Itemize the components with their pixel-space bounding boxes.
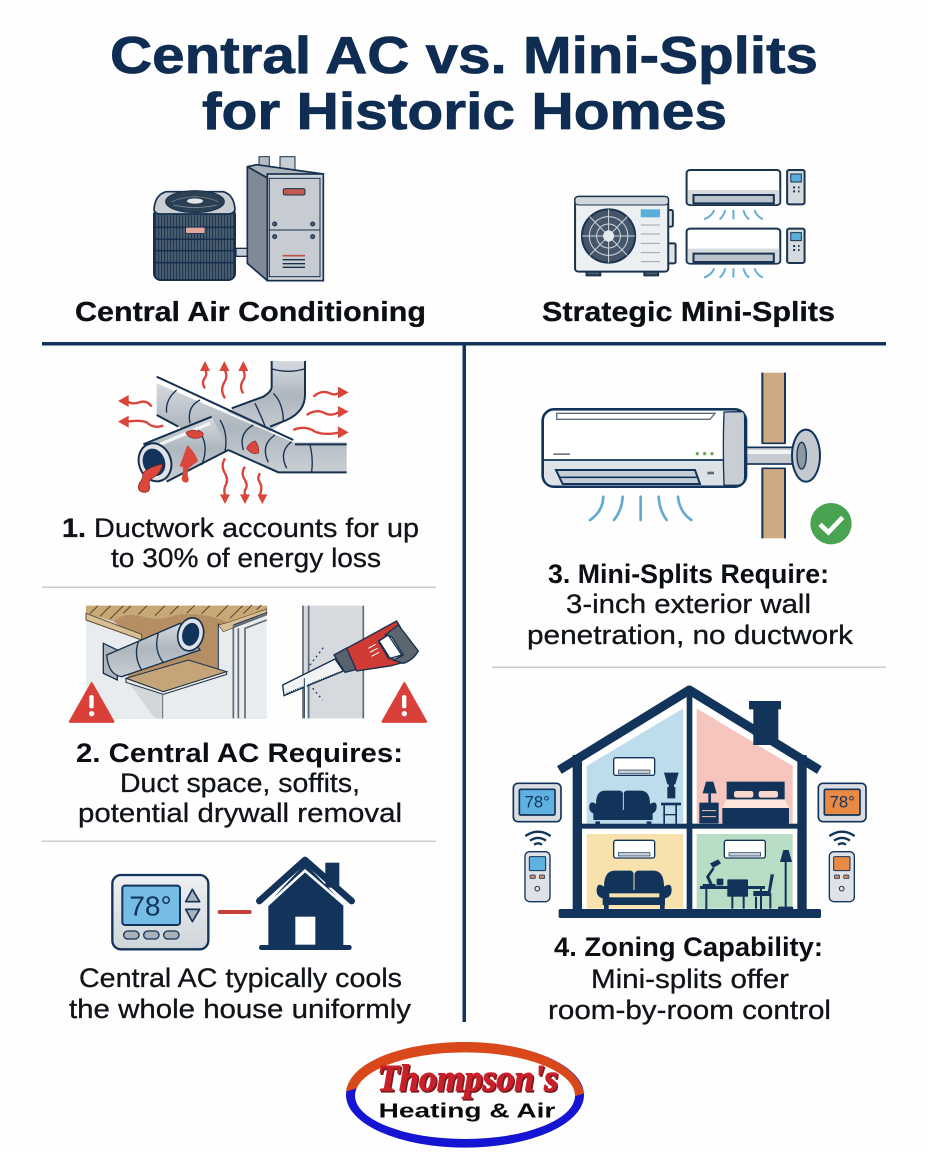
text: zoning capability: Mini-splits offer bbox=[591, 964, 789, 994]
text: whole house cooling: Central AC typically cools bbox=[79, 963, 402, 993]
text: central AC requirements: potential drywall removal bbox=[78, 798, 402, 828]
text: mini-split requirements: penetration, no ductwork bbox=[527, 620, 854, 650]
icon: leaking ducts bbox=[118, 361, 349, 504]
text: ductwork statement: to 30% of energy loss bbox=[111, 543, 381, 573]
panel: ductwork energy loss bbox=[62, 361, 419, 573]
title: Central AC vs. Mini-Splits bbox=[110, 27, 818, 85]
text: whole house cooling bbox=[69, 963, 412, 1024]
icon: mini-split outdoor and indoor units bbox=[575, 170, 805, 278]
icon: reciprocating saw cutting drywall bbox=[283, 606, 426, 722]
right thermostat and remote: 78° bbox=[830, 792, 855, 811]
title: for Historic Homes bbox=[202, 83, 727, 141]
heading: central air conditioning: Central Air Conditioning bbox=[75, 296, 426, 327]
logo: Thompson's Heating & Air: Thompson's bbox=[379, 1060, 559, 1101]
text: mini-split requirements bbox=[527, 559, 854, 650]
logo: Thompson's Heating & Air: Heating & Air bbox=[379, 1099, 555, 1122]
text: ductwork statement bbox=[62, 513, 419, 573]
text: central AC requirements: 2. Central AC Requires: bbox=[76, 738, 403, 768]
text: mini-split requirements: 3. Mini-Splits Require: bbox=[548, 559, 829, 589]
text: whole house cooling: the whole house uniformly bbox=[69, 994, 412, 1024]
text: zoning capability: 4. Zoning Capability: bbox=[554, 932, 823, 962]
text: central AC requirements bbox=[76, 738, 403, 828]
icon: zoned house cutaway with controls bbox=[513, 690, 866, 918]
icon: duct soffit in ceiling bbox=[70, 605, 267, 722]
logo: Thompson's Heating & Air: Thompson's bbox=[377, 1059, 558, 1100]
text: zoning capability bbox=[548, 932, 831, 1025]
text: mini-split requirements: 3-inch exterior wall bbox=[566, 589, 811, 619]
text: zoning capability: room-by-room control bbox=[548, 995, 831, 1025]
text: central AC requirements: Duct space, soffits, bbox=[120, 768, 360, 798]
text: ductwork statement: 1. Ductwork accounts for up bbox=[62, 513, 419, 543]
icon: thermostat linked to house: 78° bbox=[129, 890, 172, 921]
left thermostat and remote: 78° bbox=[525, 792, 550, 811]
icon: thermostat linked to house bbox=[112, 860, 352, 950]
heading: strategic mini-splits: Strategic Mini-Splits bbox=[542, 296, 835, 327]
logo: Thompson's Heating & Air bbox=[346, 1042, 584, 1148]
panel: mini-split requirements bbox=[527, 373, 854, 650]
left thermostat and remote bbox=[513, 783, 561, 902]
house structure bbox=[559, 690, 821, 918]
furniture silhouettes bbox=[589, 773, 793, 909]
right thermostat and remote bbox=[818, 783, 866, 902]
title bbox=[110, 27, 818, 141]
mini-split indoor units bbox=[614, 758, 765, 858]
panel: whole house cooling bbox=[69, 860, 412, 1024]
panel: central AC requirements bbox=[70, 605, 426, 828]
icon: wall-mounted mini-split with wall penetration bbox=[543, 373, 852, 544]
icon: central AC condenser and furnace bbox=[154, 157, 323, 281]
panel: zoning capability bbox=[513, 690, 866, 1025]
